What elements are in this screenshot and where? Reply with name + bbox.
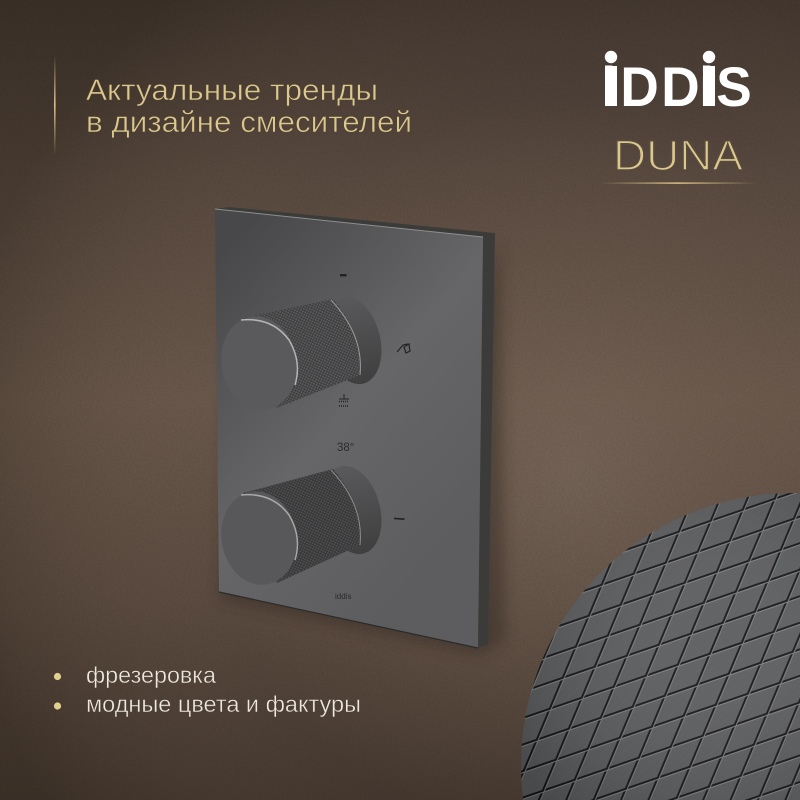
accent vertical line xyxy=(54,55,56,155)
right mark xyxy=(394,518,405,520)
icon: rain shower xyxy=(339,394,349,406)
texture detail circle xyxy=(515,480,800,800)
plate shadow xyxy=(220,240,505,655)
icon: top mark xyxy=(340,274,346,276)
bullet dot xyxy=(54,702,61,710)
plate side edge xyxy=(215,207,495,648)
plate front xyxy=(215,209,483,648)
temperature label: 38° xyxy=(337,442,354,454)
title xyxy=(86,74,412,139)
plate logo: iddis xyxy=(335,592,351,601)
gold underline xyxy=(600,182,756,184)
feature bullets xyxy=(54,662,361,717)
bullet text: модные цвета и фактуры xyxy=(86,691,361,717)
brand logo: iDDiS xyxy=(601,56,752,118)
bullet text: фрезеровка xyxy=(86,662,216,688)
lower knob xyxy=(214,459,391,591)
series name: DUNA xyxy=(613,132,743,180)
icon: hand shower xyxy=(397,344,410,353)
title: в дизайне смесителей xyxy=(86,106,412,139)
product: thermostat mixer xyxy=(214,207,505,655)
title: Актуальные тренды xyxy=(86,74,378,107)
upper knob xyxy=(214,289,391,416)
bullet dot xyxy=(54,673,61,680)
